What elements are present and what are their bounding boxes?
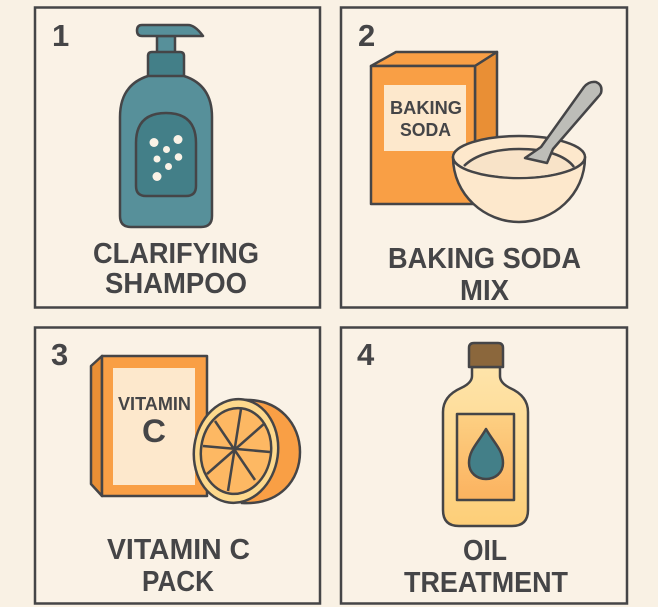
icon: shampoo beads — [150, 135, 182, 181]
box label text: VITAMIN — [118, 393, 191, 414]
box label text — [390, 97, 462, 140]
icon: bowl with spoon — [453, 82, 601, 222]
icon: oil drop — [469, 429, 503, 479]
number 1: 1 — [52, 18, 69, 53]
label: SHAMPOO — [105, 268, 247, 300]
label — [93, 238, 259, 300]
box label text: C — [142, 413, 166, 449]
label — [388, 243, 581, 307]
panel: vitamin c pack — [35, 328, 320, 604]
label: BAKING SODA — [388, 243, 581, 275]
label — [107, 534, 250, 598]
icon: oil bottle — [443, 343, 528, 526]
number 3: 3 — [51, 337, 68, 372]
label: CLARIFYING — [93, 238, 259, 270]
icon: shampoo bottle — [120, 25, 212, 227]
label: PACK — [142, 566, 214, 598]
label: OIL — [463, 535, 507, 567]
icon: baking soda box — [371, 52, 497, 204]
box label text — [118, 393, 191, 449]
label: TREATMENT — [404, 567, 568, 599]
number 2: 2 — [358, 18, 375, 53]
label: MIX — [460, 275, 510, 307]
label: VITAMIN C — [107, 534, 250, 566]
number 4: 4 — [357, 337, 375, 372]
label — [404, 535, 568, 599]
panel: oil treatment — [341, 328, 627, 604]
box label text: SODA — [400, 119, 451, 140]
icon: vitamin c box — [91, 356, 207, 496]
panel: clarifying shampoo — [35, 8, 320, 308]
box label text: BAKING — [390, 97, 462, 118]
panel: baking soda mix — [341, 8, 627, 308]
icon: orange half — [187, 394, 300, 508]
